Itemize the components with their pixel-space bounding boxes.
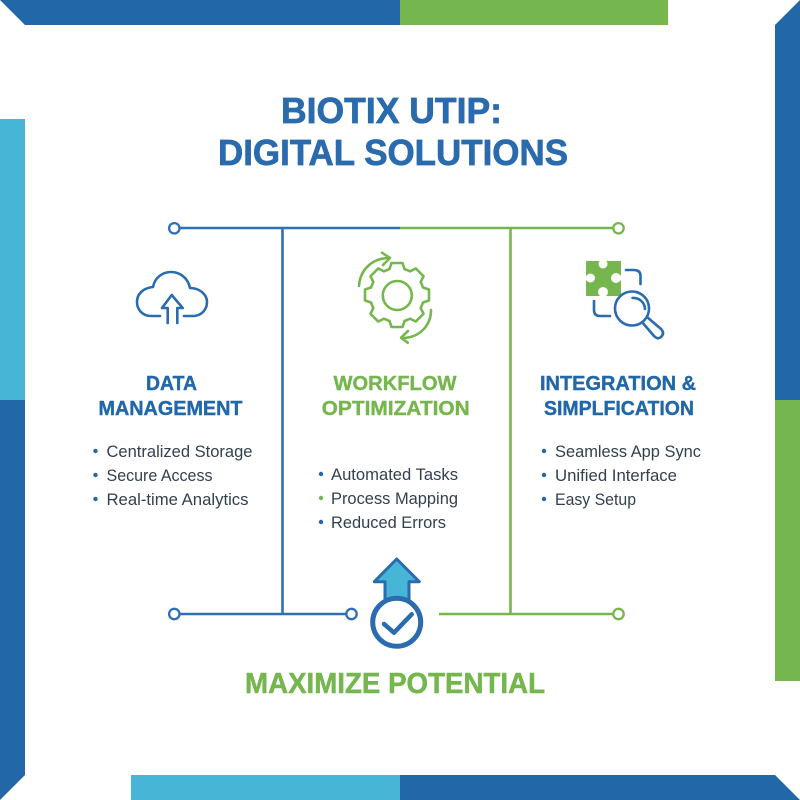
list: workflow optimization: Automated Tasks — [331, 466, 458, 484]
icon: cloud upload — [137, 272, 207, 323]
list: integration and simplification: Seamless App Sync — [555, 443, 701, 461]
list: integration and simplification — [542, 443, 701, 509]
title: DIGITAL SOLUTIONS — [218, 132, 568, 173]
list: integration and simplification: Easy Setup — [555, 491, 636, 509]
list: workflow optimization: Reduced Errors — [331, 514, 446, 532]
list: workflow optimization — [319, 466, 458, 532]
list: data management: Secure Access — [106, 467, 212, 485]
connector lines: blue — [169, 223, 400, 619]
list: workflow optimization: Process Mapping — [331, 490, 458, 508]
icon: gear with rotating arrows — [359, 253, 431, 343]
title — [218, 90, 568, 173]
list: integration and simplification: Unified Interface — [555, 467, 677, 485]
column heading: workflow optimization: OPTIMIZATION — [322, 397, 470, 420]
title: BIOTIX UTIP: — [281, 90, 502, 131]
column heading: integration and simplification: INTEGRATION & — [540, 372, 696, 395]
column heading: workflow optimization: WORKFLOW — [334, 372, 457, 395]
column heading: workflow optimization — [322, 372, 470, 420]
list: data management: Centralized Storage — [106, 443, 252, 461]
column heading: data management: DATA — [146, 372, 197, 395]
tagline: MAXIMIZE POTENTIAL — [245, 668, 545, 700]
scan brackets and magnifier — [594, 270, 663, 338]
connector lines: green — [400, 223, 624, 619]
column heading: integration and simplification — [540, 372, 696, 420]
list: data management: Real-time Analytics — [106, 491, 248, 509]
column heading: data management: MANAGEMENT — [98, 397, 243, 420]
list: data management — [93, 443, 252, 509]
column heading: integration and simplification: SIMPLFICATION — [544, 397, 694, 420]
icon: up arrow with check badge — [373, 559, 421, 646]
puzzle piece — [585, 260, 622, 297]
icon: puzzle piece and magnifier — [585, 260, 663, 338]
column heading: data management — [98, 372, 243, 420]
